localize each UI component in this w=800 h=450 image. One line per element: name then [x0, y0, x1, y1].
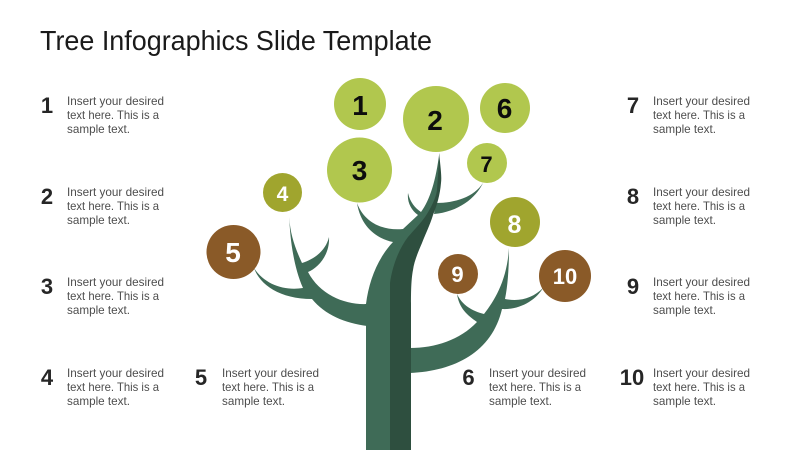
circle 10 — [539, 250, 591, 302]
list item 4: Insert your desired — [67, 366, 164, 380]
list item 1: 1 — [41, 93, 53, 118]
list item 8: sample text. — [653, 213, 716, 227]
list item 9: 9 — [627, 274, 639, 299]
list item 8: text here. This is a — [653, 199, 745, 213]
circle 2 — [403, 86, 469, 152]
list item 4: text here. This is a — [67, 380, 159, 394]
list item 6: text here. This is a — [489, 380, 581, 394]
circle 5: 5 — [225, 237, 241, 268]
circle 1: 1 — [352, 90, 368, 121]
circle 6 — [480, 83, 530, 133]
circle 7: 7 — [480, 152, 493, 177]
list item 1: text here. This is a — [67, 108, 159, 122]
list item 2: text here. This is a — [67, 199, 159, 213]
title: Tree Infographics Slide Template — [40, 25, 432, 56]
list item 8: Insert your desired — [653, 185, 750, 199]
list item 8 — [627, 184, 750, 227]
circle 1 — [334, 78, 386, 130]
circle 10: 10 — [553, 264, 577, 289]
circle 4: 4 — [277, 183, 289, 206]
list item 2: Insert your desired — [67, 185, 164, 199]
circle 3: 3 — [352, 155, 367, 186]
list item 6: sample text. — [489, 394, 552, 408]
list item 1: Insert your desired — [67, 94, 164, 108]
list item 5: Insert your desired — [222, 366, 319, 380]
list item 6: Insert your desired — [489, 366, 586, 380]
list item 1: sample text. — [67, 122, 130, 136]
list item 5 — [195, 365, 319, 408]
list item 7 — [627, 93, 750, 136]
list item 10: 10 — [620, 365, 644, 390]
list item 7: text here. This is a — [653, 108, 745, 122]
list item 2: 2 — [41, 184, 53, 209]
list item 5: 5 — [195, 365, 207, 390]
list item 2: sample text. — [67, 213, 130, 227]
circle 4 — [263, 173, 302, 212]
list item 5: text here. This is a — [222, 380, 314, 394]
list item 9: Insert your desired — [653, 275, 750, 289]
tree: right limb with branches 8, 9 and 10 — [410, 248, 543, 373]
list item 9: sample text. — [653, 303, 716, 317]
list item 3: Insert your desired — [67, 275, 164, 289]
tree: dark trunk side — [390, 153, 441, 450]
list item 10: Insert your desired — [653, 366, 750, 380]
circle 5 — [206, 225, 260, 279]
list item 7: sample text. — [653, 122, 716, 136]
list item 3: 3 — [41, 274, 53, 299]
tree: light trunk with branches 2 and 3 — [357, 153, 439, 450]
circle 3 — [327, 138, 392, 202]
list item 3: text here. This is a — [67, 289, 159, 303]
list item 2 — [41, 184, 164, 227]
list item 7: 7 — [627, 93, 639, 118]
tree illustration — [254, 153, 543, 450]
list item 4: sample text. — [67, 394, 130, 408]
tree: branch 7 — [434, 183, 483, 214]
list item 10: sample text. — [653, 394, 716, 408]
list item 10 — [620, 365, 750, 408]
circle 9 — [438, 254, 478, 294]
list item 6 — [462, 365, 586, 408]
list item 9: text here. This is a — [653, 289, 745, 303]
circle 2: 2 — [427, 105, 443, 136]
list item 7: Insert your desired — [653, 94, 750, 108]
list item 9 — [627, 274, 750, 317]
list item 1 — [41, 93, 164, 136]
circle 7 — [467, 143, 507, 183]
list item 8: 8 — [627, 184, 639, 209]
list item 6: 6 — [462, 365, 475, 390]
list item 4: 4 — [41, 365, 54, 390]
list item 4 — [41, 365, 164, 408]
list item 3: sample text. — [67, 303, 130, 317]
circle 8: 8 — [508, 211, 522, 239]
circle 8 — [490, 197, 540, 247]
tree: left limb with branches 4 and 5 — [254, 217, 367, 326]
circle 6: 6 — [497, 93, 512, 124]
list item 5: sample text. — [222, 394, 285, 408]
list item 10: text here. This is a — [653, 380, 745, 394]
circle 9: 9 — [451, 262, 464, 287]
list item 3 — [41, 274, 164, 317]
